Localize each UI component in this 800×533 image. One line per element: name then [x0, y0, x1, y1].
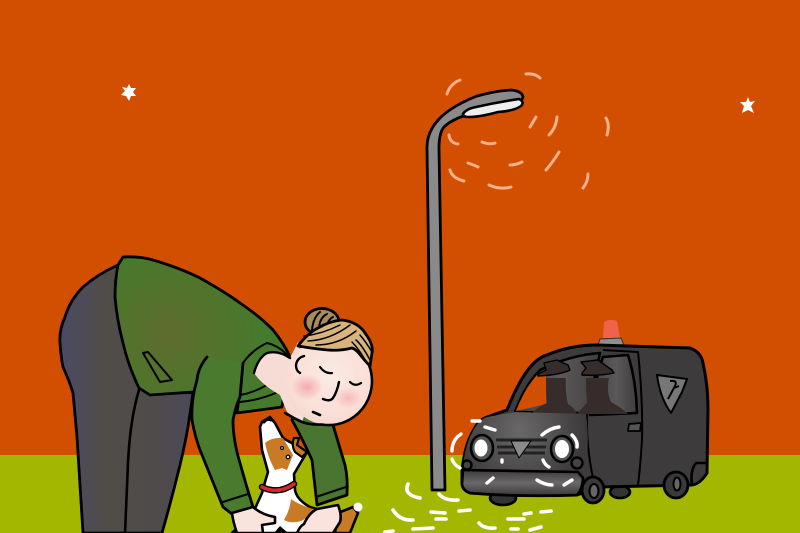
- dog eyes: [280, 446, 290, 459]
- far hand: [297, 505, 341, 533]
- street lamp: [427, 90, 523, 490]
- near hand: [232, 507, 275, 533]
- security van: [462, 320, 708, 505]
- dog back patch: [284, 499, 321, 522]
- far cuff: [316, 487, 346, 497]
- front wheel: [582, 477, 604, 503]
- lamp light rays: [447, 74, 608, 188]
- star left: [121, 84, 136, 101]
- neck: [254, 342, 310, 422]
- cheek right: [334, 387, 362, 409]
- door handle: [628, 423, 641, 431]
- collar band: [243, 343, 290, 363]
- van body: [462, 345, 708, 496]
- nose: [323, 382, 339, 400]
- door window: [590, 355, 637, 415]
- dog head patch: [265, 438, 293, 470]
- collar folds: [240, 380, 278, 402]
- grille and badge: [496, 440, 547, 458]
- woman: [60, 257, 372, 533]
- door outline: [587, 350, 642, 487]
- jaw outline: [285, 365, 372, 425]
- hair bun: [305, 308, 339, 336]
- shield logo: [657, 375, 687, 413]
- rear wheel arch block: [692, 463, 707, 485]
- eye left: [320, 367, 332, 373]
- far arm: [292, 405, 347, 505]
- rear wheel: [664, 472, 688, 498]
- driver silhouette: [531, 360, 577, 414]
- head: [285, 308, 372, 425]
- trousers: [60, 265, 193, 533]
- dog: [232, 417, 362, 533]
- hair: [298, 320, 372, 366]
- passenger silhouette: [577, 360, 628, 414]
- dog tail tip: [354, 502, 362, 512]
- near cuff: [223, 494, 248, 502]
- ground light reflections: [385, 484, 551, 532]
- lamp head light: [463, 99, 523, 117]
- sky through windshield: [516, 372, 546, 411]
- roof beacon: [598, 320, 624, 345]
- hood: [462, 412, 588, 473]
- star right: [740, 97, 755, 113]
- far wheels: [490, 486, 630, 505]
- pocket: [143, 352, 172, 382]
- dog collar: [262, 484, 294, 490]
- cheek left: [291, 374, 323, 400]
- mouth: [313, 412, 320, 415]
- dog nose: [264, 419, 271, 422]
- leg divider: [125, 390, 139, 533]
- dog hind: [335, 507, 358, 533]
- sweater body: [115, 257, 290, 413]
- windshield: [515, 353, 600, 413]
- grass ground: [0, 455, 800, 533]
- face: [286, 337, 372, 425]
- right headlight: [551, 436, 573, 462]
- near arm: [192, 357, 253, 514]
- left headlight: [471, 435, 493, 461]
- van light glints: [452, 421, 577, 485]
- dog ear: [293, 438, 307, 457]
- front bumper: [462, 470, 583, 496]
- eye right: [350, 382, 361, 385]
- dog body: [232, 417, 340, 533]
- dog spot: [274, 526, 288, 533]
- ear: [296, 356, 304, 373]
- side lamps: [462, 458, 582, 470]
